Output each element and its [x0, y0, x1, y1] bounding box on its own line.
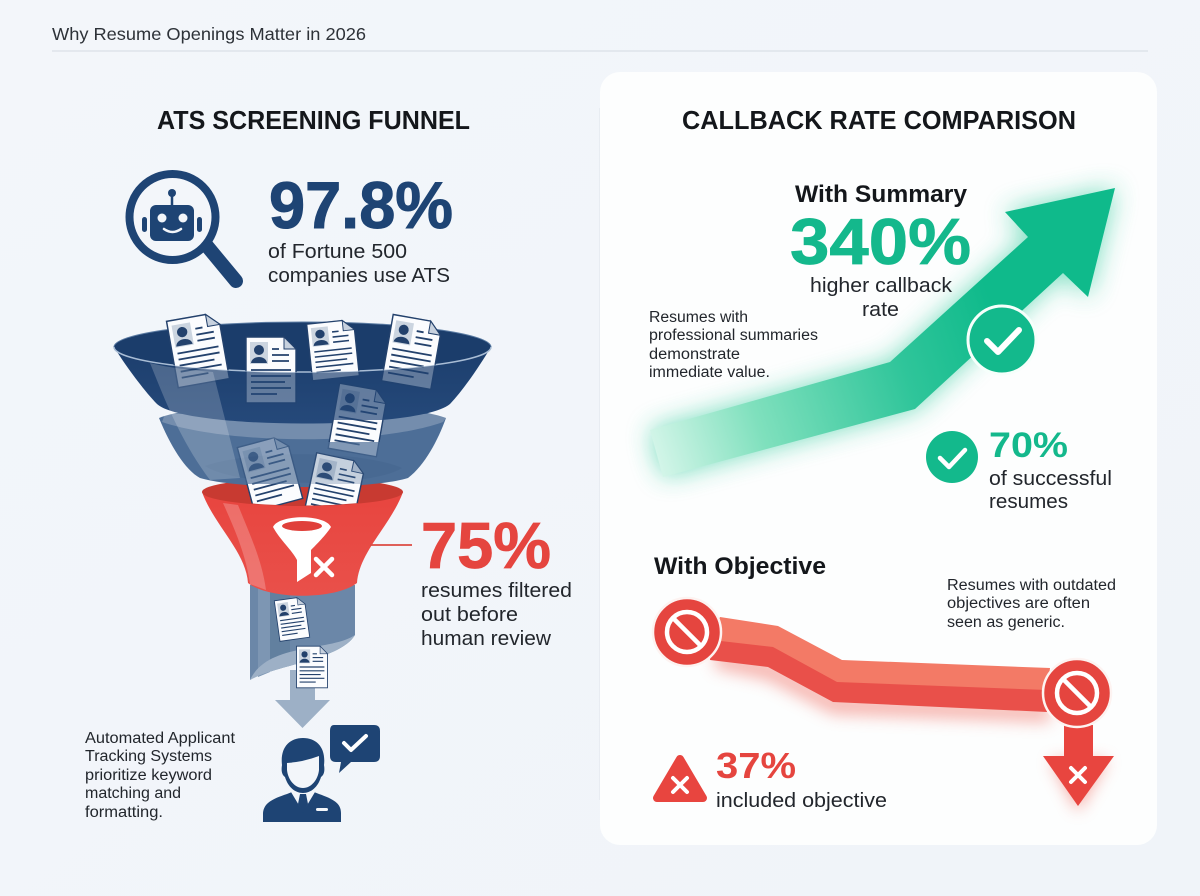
- text: ATS explanation: Automated Applicant: [85, 730, 236, 747]
- light beam through funnel: [150, 363, 240, 480]
- stat: 70% of successful resumes: 70%: [989, 426, 1068, 465]
- text: summary explanation: demonstrate: [649, 346, 740, 363]
- icon: robot magnifying glass: [130, 174, 236, 281]
- funnel column: [250, 585, 355, 680]
- stat: 97.8%: of Fortune 500: [268, 240, 407, 263]
- stat: 75% filtered: human review: [421, 627, 551, 650]
- stat: 70% of successful resumes: resumes: [989, 490, 1068, 513]
- funnel top bowl: [114, 322, 491, 424]
- stat: 75% filtered: 75%: [421, 509, 551, 582]
- text: objective explanation: seen as generic.: [947, 614, 1065, 631]
- icon: blocked end: [1043, 659, 1111, 727]
- arrow: down to recruiter: [275, 670, 330, 728]
- arrow: red down with x: [1043, 725, 1114, 812]
- text: ATS explanation: prioritize keyword: [85, 767, 212, 784]
- icon: recruiter with approval bubble: [263, 725, 380, 822]
- stat: 37% included objective: 37%: [716, 745, 796, 786]
- heading: ATS screening funnel: ATS SCREENING FUNNEL: [157, 105, 470, 135]
- text: summary explanation: Resumes with: [649, 309, 748, 326]
- stat: 37% included objective: [716, 745, 887, 812]
- funnel middle band: [159, 404, 446, 487]
- icon: blocked start: [653, 598, 721, 666]
- resume documents in funnel: [167, 312, 442, 521]
- arrow: rising green trend: [650, 188, 1115, 477]
- stat: 37% included objective: included objective: [716, 789, 887, 812]
- funnel red filter stage: [202, 478, 403, 596]
- stat: 97.8%: 97.8%: [269, 168, 453, 242]
- connector line: [370, 544, 412, 546]
- label: with summary 340%: rate: [862, 298, 899, 321]
- icon: green check badge: [926, 431, 978, 483]
- stat: 75% filtered: resumes filtered: [421, 579, 572, 602]
- header title: Why Resume Openings Matter in 2026: [52, 24, 366, 44]
- icon: warning triangle: [657, 759, 703, 798]
- icon: check on arrow: [968, 306, 1036, 374]
- stat: 75% filtered: [421, 509, 572, 650]
- stat: 70% of successful resumes: [989, 426, 1112, 513]
- text: objective explanation: objectives are often: [947, 595, 1090, 612]
- text: summary explanation: professional summaries: [649, 327, 818, 344]
- stat: 70% of successful resumes: of successful: [989, 467, 1112, 490]
- text: ATS explanation: Tracking Systems: [85, 748, 212, 765]
- stat: 75% filtered: out before: [421, 603, 518, 626]
- label: with summary 340%: 340%: [790, 205, 971, 278]
- label: with summary 340%: With Summary: [795, 181, 968, 208]
- stat: 97.8%: companies use ATS: [268, 264, 450, 287]
- icon: filter with x: [273, 517, 332, 582]
- resume documents falling through column: [274, 597, 328, 688]
- text: ATS explanation: [85, 730, 236, 821]
- panel: callback card background: [600, 72, 1157, 845]
- label: with summary 340%: [790, 181, 971, 321]
- stat: 97.8%: [268, 168, 453, 287]
- text: summary explanation: [649, 309, 818, 381]
- text: objective explanation: [947, 577, 1116, 631]
- arrow: declining red trend: [710, 617, 1050, 722]
- heading: with objective: With Objective: [654, 553, 826, 580]
- label: with summary 340%: higher callback: [810, 274, 953, 297]
- text: objective explanation: Resumes with outdated: [947, 577, 1116, 594]
- text: summary explanation: immediate value.: [649, 364, 770, 381]
- text: ATS explanation: formatting.: [85, 804, 163, 821]
- text: ATS explanation: matching and: [85, 785, 181, 802]
- heading: callback rate comparison: CALLBACK RATE COMPARISON: [682, 105, 1076, 135]
